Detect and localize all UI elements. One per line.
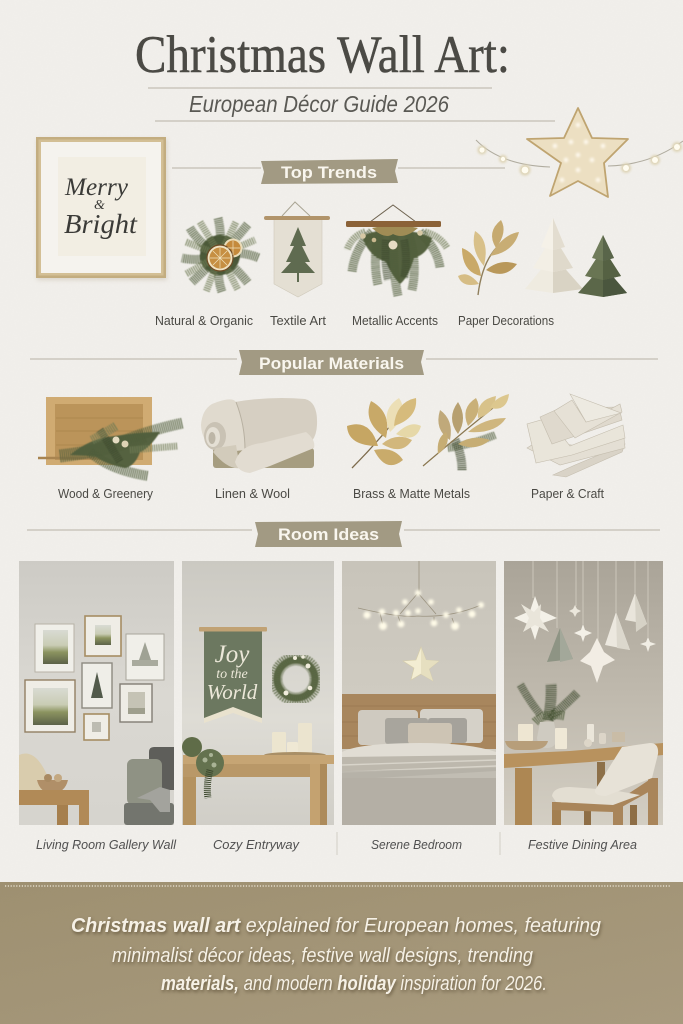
hanging strings xyxy=(533,561,648,642)
material: brass leaves xyxy=(347,398,421,468)
string lights xyxy=(476,140,683,176)
ribbon heading: Room Ideas: Room Ideas xyxy=(278,525,379,544)
ribbon heading: Top Trends xyxy=(261,159,398,184)
room captions: Cozy Entryway xyxy=(213,837,300,852)
subtitle: European Décor Guide 2026 xyxy=(189,91,449,117)
felt banner: Joy to the World xyxy=(199,627,267,723)
table plant and vase xyxy=(520,684,577,748)
side table with bowl xyxy=(19,754,89,825)
wooden star with lights xyxy=(527,108,628,197)
trend labels: Metallic Accents xyxy=(352,313,438,328)
trend labels: Natural & Organic xyxy=(155,313,253,328)
trend labels: Paper Decorations xyxy=(458,313,554,328)
branch of glowing lights xyxy=(358,561,484,630)
trend: Textile Art banner with tree xyxy=(264,202,330,297)
material: wood tray and greenery xyxy=(38,397,183,476)
material labels: Brass & Matte Metals xyxy=(353,486,470,501)
ribbon heading: Top Trends: Top Trends xyxy=(281,163,377,182)
material labels: Linen & Wool xyxy=(215,486,290,501)
footer description text: minimalist décor ideas, festive wall designs, trending xyxy=(112,945,533,967)
section rule lines: popular materials xyxy=(30,358,658,360)
paper star xyxy=(403,647,439,681)
room captions: Living Room Gallery Wall xyxy=(36,837,177,852)
ribbon heading: Popular Materials: Popular Materials xyxy=(259,354,404,373)
room panel: festive dining area xyxy=(504,561,663,825)
trend: Paper Decorations gold leaf sprig xyxy=(458,220,519,295)
room captions: Serene Bedroom xyxy=(371,837,462,852)
potted greenery xyxy=(182,737,224,798)
trend labels: Textile Art xyxy=(270,313,326,328)
framed print: Merry & Bright: Bright xyxy=(64,209,139,239)
material: paper sheets stack xyxy=(527,394,625,477)
framed print: Merry & Bright xyxy=(36,137,167,280)
hanging paper stars and trees xyxy=(514,593,656,683)
material labels xyxy=(58,486,604,501)
trend labels xyxy=(155,313,554,328)
felt banner: Joy to the World: World xyxy=(207,680,258,704)
ribbon heading: Room Ideas xyxy=(255,521,402,547)
footer description text: materials, and modern holiday inspiration for 2026. xyxy=(161,973,547,995)
felt banner: Joy to the World: Joy xyxy=(215,641,250,668)
material labels: Paper & Craft xyxy=(531,486,604,501)
round wreath xyxy=(276,655,316,699)
material labels: Wood & Greenery xyxy=(58,486,153,501)
trend: green paper tree xyxy=(578,235,627,297)
dining table xyxy=(504,743,663,825)
framed print: Merry & Bright: Merry xyxy=(64,174,129,201)
section rule lines: room ideas xyxy=(27,529,660,531)
framed print: Merry & Bright: & xyxy=(94,198,105,213)
title: Christmas Wall Art: xyxy=(135,26,510,84)
trend: white paper tree xyxy=(525,218,583,293)
trend: Natural & Organic pine and orange wreath xyxy=(182,218,259,292)
gallery frames xyxy=(25,616,164,740)
ribbon heading: Popular Materials xyxy=(239,350,424,375)
console table with candles xyxy=(183,723,334,825)
chair xyxy=(552,743,658,825)
material: matte metal leaves with pine xyxy=(423,394,509,470)
footer description text xyxy=(71,915,601,995)
room panel: cozy entryway xyxy=(182,561,334,825)
room captions: Festive Dining Area xyxy=(528,837,637,852)
section rule lines: top trends xyxy=(172,167,505,169)
footer band xyxy=(0,882,683,1024)
bed xyxy=(342,694,496,825)
felt banner: Joy to the World: to the xyxy=(216,667,248,682)
footer description text: Christmas wall art explained for European homes, featuring xyxy=(71,915,601,937)
room panel: serene bedroom xyxy=(342,561,496,825)
trend: Metallic Accents hanging pine swag xyxy=(346,205,447,296)
table settings xyxy=(505,724,625,750)
material: rolled linen and wool xyxy=(201,398,317,473)
room captions xyxy=(36,832,637,855)
armchair xyxy=(124,747,174,825)
room panel: living room gallery wall xyxy=(19,561,174,825)
